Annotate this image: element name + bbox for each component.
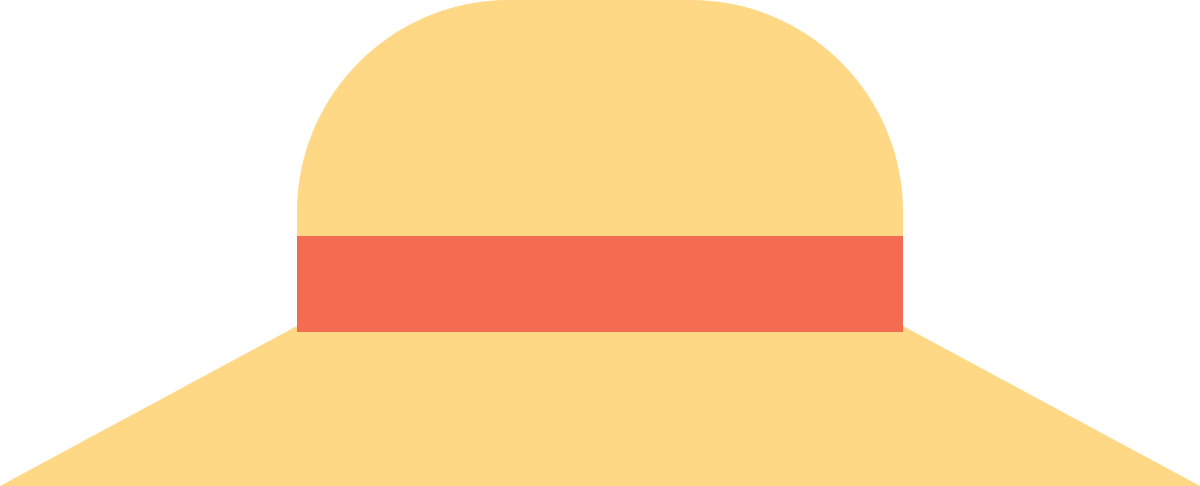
hat brim xyxy=(0,326,1200,486)
hat band xyxy=(297,236,903,332)
hat crown xyxy=(297,0,903,236)
